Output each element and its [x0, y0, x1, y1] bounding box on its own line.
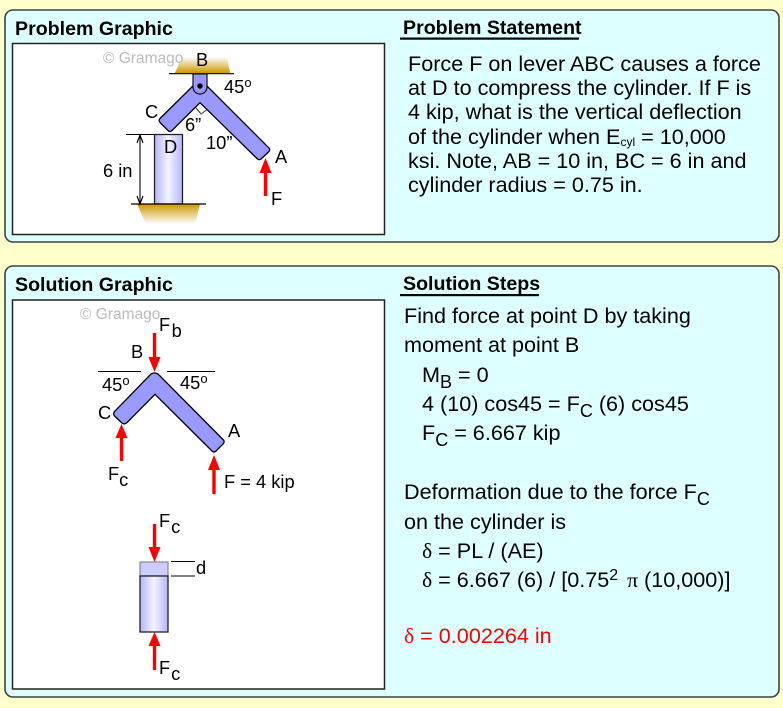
- lever labels: o: [200, 371, 208, 386]
- cylinder D: [154, 134, 182, 204]
- dimension 6 in: [103, 134, 154, 204]
- ground support top: [169, 57, 234, 74]
- lever labels: C: [98, 402, 111, 423]
- moment steps: = 0: [452, 362, 489, 387]
- moment steps: M: [422, 362, 440, 387]
- ground support bottom: [131, 204, 206, 224]
- labels: D: [164, 136, 177, 157]
- problem statement text: [408, 51, 761, 197]
- moment steps: moment at point B: [404, 332, 579, 357]
- deformation steps: 2: [609, 567, 618, 584]
- moment steps: [404, 303, 691, 450]
- arrow: top Fc: c: [171, 516, 180, 537]
- heading: solution steps: Solution Steps: [403, 273, 540, 295]
- heading: solution graphic: Solution Graphic: [15, 274, 173, 296]
- lever free body: [114, 373, 224, 452]
- arrow: bottom Fc: [148, 632, 180, 684]
- moment steps: = 6.667 kip: [448, 420, 560, 445]
- arrow: Fb: [148, 333, 160, 372]
- cylinder free body: [140, 562, 168, 632]
- problem statement text: 4 kip, what is the vertical deflection: [408, 99, 742, 124]
- labels: 10”: [206, 132, 232, 153]
- lever labels: F = 4 kip: [224, 471, 295, 492]
- arrow: Fc at C: [116, 424, 128, 461]
- moment steps: Find force at point D by taking: [404, 303, 691, 328]
- deformation steps: δ = 6.667 (6) / [0.75: [422, 567, 609, 592]
- result: δ = 0.002264 in: [404, 623, 552, 648]
- problem graphic box: [12, 44, 384, 234]
- watermark: © Gramago: [80, 306, 160, 323]
- labels: [145, 49, 288, 209]
- solution graphic box: [12, 300, 384, 689]
- watermark: © Gramago: [103, 50, 183, 67]
- right angle mark: [196, 108, 208, 114]
- moment steps: F: [422, 420, 435, 445]
- dimension 6 in: 6 in: [103, 160, 132, 181]
- moment steps: 4 (10) cos45 = F: [422, 391, 580, 416]
- moment steps: (6) cos45: [593, 391, 689, 416]
- problem statement text: cylinder radius = 0.75 in.: [408, 172, 643, 197]
- deformation steps: on the cylinder is: [404, 509, 566, 534]
- lever labels: 45: [180, 372, 200, 393]
- pin bracket B: [193, 74, 207, 94]
- deformation d: [171, 557, 206, 578]
- heading: problem statement: Problem Statement: [403, 17, 582, 39]
- deformation steps: Deformation due to the force F: [404, 479, 697, 504]
- heading: problem graphic: Problem Graphic: [15, 18, 173, 40]
- deformation d: d: [196, 557, 206, 578]
- lever labels: B: [131, 341, 143, 362]
- panel: solution: [5, 266, 779, 697]
- moment steps: B: [440, 372, 452, 392]
- angle reference lines: [98, 370, 215, 372]
- labels: A: [275, 146, 288, 167]
- labels: o: [244, 75, 252, 90]
- deformation steps: δ = PL / (AE): [422, 538, 544, 563]
- arrow: top Fc: [148, 510, 180, 562]
- problem statement text: of the cylinder when E: [408, 124, 620, 149]
- labels: C: [145, 101, 158, 122]
- arrow: top Fc: F: [159, 510, 170, 531]
- deformation steps: π (10,000)]: [627, 567, 730, 592]
- labels: 45: [224, 76, 244, 97]
- lever labels: F: [108, 463, 119, 484]
- arrow: bottom Fc: F: [159, 657, 170, 678]
- moment steps: C: [435, 430, 448, 450]
- lever ABC: [159, 79, 270, 160]
- lever labels: F: [159, 314, 170, 335]
- arrow: force F: [260, 158, 272, 196]
- problem statement text: ksi. Note, AB = 10 in, BC = 6 in and: [408, 148, 746, 173]
- panel: problem: [5, 10, 779, 242]
- lever labels: b: [172, 320, 182, 341]
- arrow: F at A: [208, 455, 220, 494]
- labels: B: [196, 49, 208, 70]
- lever labels: c: [119, 469, 128, 490]
- labels: F: [271, 188, 282, 209]
- arrow: bottom Fc: c: [171, 663, 180, 684]
- moment steps: C: [580, 401, 593, 421]
- problem statement text: = 10,000: [635, 124, 726, 149]
- lever labels: 45: [102, 374, 122, 395]
- problem statement text: Force F on lever ABC causes a force: [408, 51, 761, 76]
- problem statement text: cyl: [620, 135, 635, 149]
- lever labels: o: [122, 373, 130, 388]
- lever labels: A: [228, 420, 241, 441]
- lever labels: [98, 314, 295, 492]
- deformation steps: C: [697, 489, 710, 509]
- deformation steps: [404, 479, 730, 592]
- labels: 6”: [185, 114, 201, 135]
- problem statement text: at D to compress the cylinder. If F is: [408, 75, 751, 100]
